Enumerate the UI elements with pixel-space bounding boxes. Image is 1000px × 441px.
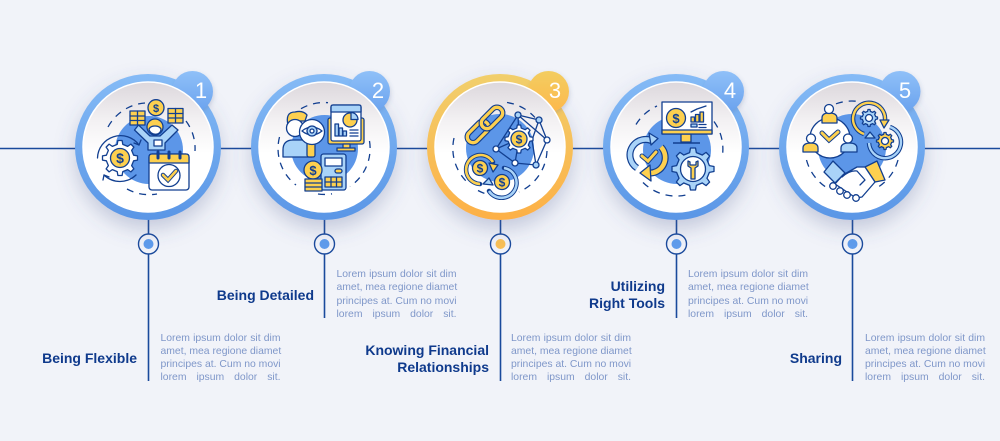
icon: detailed analysis: $ <box>309 163 317 178</box>
text block 4: amet, mea regione diamet <box>688 282 809 293</box>
text block 3: principes at. Cum no movi <box>511 359 631 370</box>
icon: financial relationships: $ <box>516 132 523 146</box>
connector and node 3 <box>490 215 510 381</box>
badge 1: 1 <box>195 78 207 103</box>
text block 1 <box>160 332 282 383</box>
text block 5: amet, mea regione diamet <box>865 346 986 357</box>
text block 4: lorem ipsum dolor sit. <box>688 309 808 320</box>
text block 5 <box>865 332 986 383</box>
panel: step 3 circle <box>427 71 573 220</box>
connector and node 5 <box>842 215 862 381</box>
connector and node 1 <box>138 215 158 381</box>
heading: Being Detailed: Being Detailed <box>217 286 314 302</box>
text block 4: Lorem ipsum dolor sit dim <box>688 269 808 280</box>
badge 5 <box>880 71 920 112</box>
text block 3: Lorem ipsum dolor sit dim <box>511 332 631 344</box>
text block 5: principes at. Cum no movi <box>865 359 985 370</box>
icon: flexible finance <box>98 100 195 195</box>
icon: flexible finance: $ <box>116 150 124 166</box>
text block 1: amet, mea regione diamet <box>160 346 281 357</box>
badge 4 <box>703 71 744 112</box>
heading: Utilizing Right Tools: Utilizing <box>611 278 665 294</box>
badge 2 <box>349 71 390 112</box>
heading: Knowing Financial Relationships <box>365 342 489 375</box>
text block 5: lorem ipsum dolor sit. <box>865 372 985 383</box>
text block 2: principes at. Cum no movi <box>336 296 457 307</box>
text block 3 <box>511 332 632 383</box>
text block 2 <box>336 269 458 320</box>
badge 1 <box>172 71 213 112</box>
icon: financial relationships: $ <box>477 162 484 176</box>
heading: Sharing: Sharing <box>790 350 842 366</box>
text block 5: Lorem ipsum dolor sit dim <box>865 332 985 344</box>
text block 4 <box>688 269 809 320</box>
panel: step 2 circle <box>251 71 397 220</box>
horizontal timeline <box>0 148 1000 150</box>
icon: flexible finance: $ <box>153 103 159 115</box>
text block 4: principes at. Cum no movi <box>688 296 808 307</box>
badge 5: 5 <box>899 78 911 103</box>
connector and node 4 <box>666 215 686 318</box>
text block 1: lorem ipsum dolor sit. <box>160 372 280 383</box>
text block 2: lorem ipsum dolor sit. <box>336 309 456 320</box>
heading: Utilizing Right Tools <box>589 278 665 311</box>
heading: Knowing Financial Relationships: Knowing Financial <box>365 342 489 358</box>
panel: step 4 circle <box>603 71 749 220</box>
panel: step 5 circle <box>779 71 925 220</box>
icon: financial relationships <box>453 102 550 198</box>
badge 2: 2 <box>372 78 384 103</box>
badge 3 <box>528 71 569 112</box>
panel: step 1 circle <box>75 71 221 220</box>
icon: financial relationships: $ <box>499 176 506 190</box>
icon: right tools: $ <box>672 111 680 126</box>
icon: sharing <box>803 101 901 201</box>
heading: Being Flexible: Being Flexible <box>42 350 137 366</box>
text block 3: amet, mea regione diamet <box>511 346 632 357</box>
text block 1: principes at. Cum no movi <box>160 359 281 370</box>
text block 3: lorem ipsum dolor sit. <box>511 372 631 383</box>
icon: detailed analysis <box>278 103 370 194</box>
heading: Knowing Financial Relationships: Relationships <box>397 358 489 374</box>
icon: right tools <box>630 102 723 196</box>
badge 3: 3 <box>549 78 561 103</box>
text block 2: amet, mea regione diamet <box>336 282 457 293</box>
badge 4: 4 <box>724 78 736 103</box>
text block 1: Lorem ipsum dolor sit dim <box>160 332 280 344</box>
heading: Utilizing Right Tools: Right Tools <box>589 294 665 310</box>
connector and node 2 <box>314 215 334 318</box>
text block 2: Lorem ipsum dolor sit dim <box>336 269 456 280</box>
